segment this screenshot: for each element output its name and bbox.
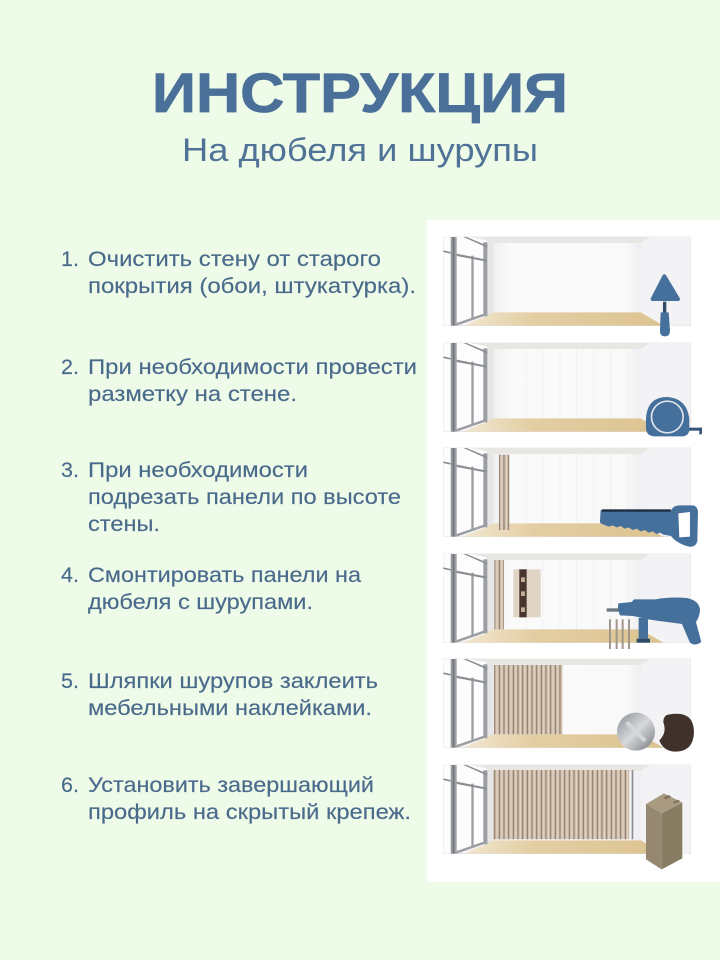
icon: end profile [646,793,682,869]
slats full wall [493,770,629,839]
step 4 text: Смонтировать панели на [88,563,361,587]
wood slat strip [494,560,504,629]
step 1 text: покрытия (обои, штукатурка). [88,274,416,298]
title: ИНСТРУКЦИЯ [152,61,568,124]
step 1 text: 1. [61,247,79,271]
icon: hand saw [600,505,698,547]
step 5 text: 5. [61,669,79,693]
step 3 text [61,458,401,536]
step 2 text: разметку на стене. [88,382,297,406]
step 2 text [61,355,417,406]
step 1 text [61,247,416,298]
icon: dowels [610,619,629,649]
room 2 with tape measure [443,343,702,436]
step 2 text: При необходимости провести [88,355,417,379]
step 3 text: подрезать панели по высоте [88,485,401,509]
step 2 text: 2. [61,355,79,379]
step 1 text: Очистить стену от старого [88,247,381,271]
room 3 with saw [443,448,698,547]
room 1 with trowel [443,237,691,336]
room 6 with end profile [443,765,691,869]
step 6 text: 6. [61,773,79,797]
icon: dark wood sticker [659,714,694,752]
step 5 text: Шляпки шурупов заклеить [88,669,378,693]
room 4 with drill and dowels [443,554,701,649]
step 3 text: 3. [61,458,79,482]
room 5 with furniture stickers [443,659,694,752]
icon: hammer drill [607,598,701,645]
subtitle: На дюбеля и шурупы [182,132,538,168]
icon: silver sticker [617,713,655,751]
slats partial wall [494,665,563,734]
icon: tape measure [646,397,702,436]
step 4 text [61,563,361,614]
step 3 text: стены. [88,512,160,536]
panel sample [513,569,541,617]
step 4 text: 4. [61,563,79,587]
step 6 text: профиль на скрытый крепеж. [88,800,411,824]
step 5 text: мебельными наклейками. [88,696,372,720]
step 5 text [61,669,378,720]
icon: trowel [653,276,678,336]
wood slat strip [499,455,509,530]
step 4 text: дюбеля с шурупами. [88,590,313,614]
step 6 text: Установить завершающий [88,773,374,797]
step 6 text [61,773,411,824]
panel: room illustrations [427,220,720,882]
step 3 text: При необходимости [88,458,308,482]
